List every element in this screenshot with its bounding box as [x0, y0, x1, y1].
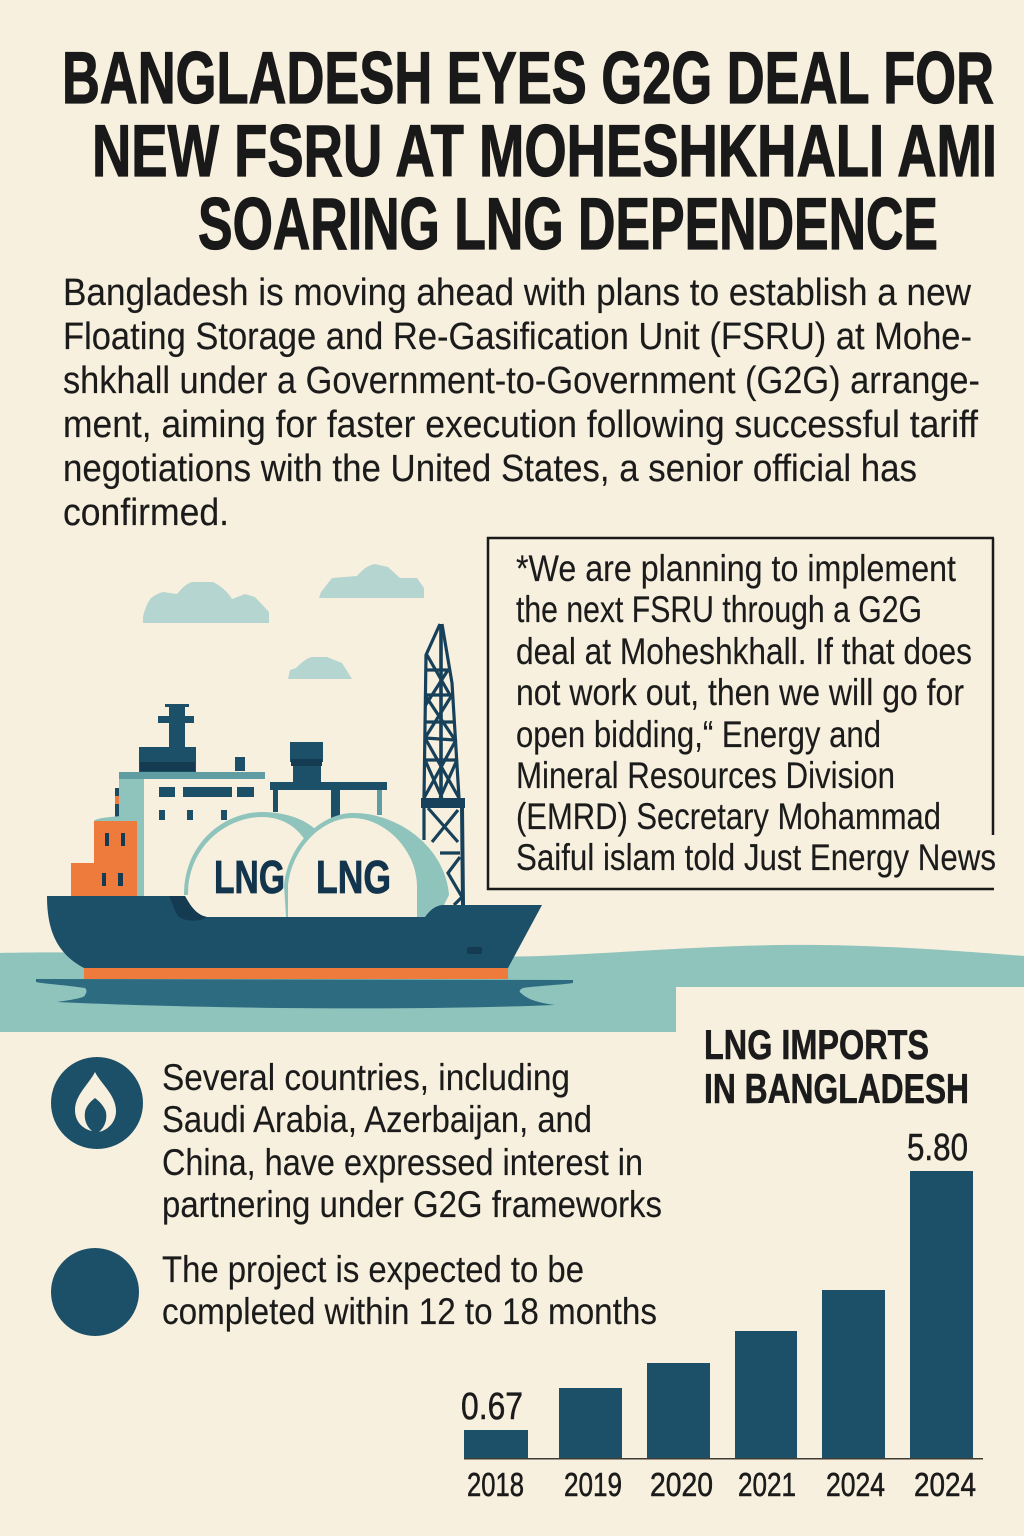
bullet: G2G partners: Saudi Arabia, Azerbaijan, and [162, 1099, 592, 1140]
clouds [143, 564, 424, 679]
bar chart: 0.67 [461, 1386, 523, 1428]
quote box: Mineral Resources Division [516, 755, 895, 796]
orange block [71, 821, 137, 896]
quote box: *We are planning to implement [516, 548, 957, 589]
illustration: LNG ship [36, 624, 573, 1008]
bullet: G2G partners: Several countries, including [162, 1057, 570, 1098]
icon: plain circle [51, 1248, 139, 1336]
bullet: G2G partners: partnering under G2G frameworks [162, 1184, 662, 1225]
chart heading [704, 1021, 969, 1112]
LNG tanks [184, 812, 316, 917]
tank labels: LNG [316, 851, 391, 903]
title [62, 38, 997, 265]
quote box [488, 538, 996, 889]
tank labels [214, 851, 391, 903]
bar chart: 2018 [467, 1466, 524, 1503]
rear small stacks [115, 788, 121, 817]
hull [47, 896, 542, 968]
bar chart: 5.80 [907, 1127, 968, 1169]
bullet: G2G partners: China, have expressed interest in [162, 1142, 643, 1183]
windows [159, 787, 254, 820]
bar chart [461, 1127, 983, 1503]
intro paragraph: ment, aiming for faster execution following successful tariff [63, 404, 978, 446]
superstructure [119, 776, 144, 896]
tower lattice [421, 624, 465, 905]
bullet: timeline [162, 1249, 657, 1332]
bar chart: 2024 [826, 1466, 885, 1503]
tank labels: LNG [214, 851, 285, 903]
quote box: not work out, then we will go for [516, 672, 964, 713]
orange waterline [84, 968, 508, 979]
intro paragraph: confirmed. [63, 492, 229, 534]
bullet: timeline: The project is expected to be [162, 1249, 584, 1290]
quote box: open bidding,“ Energy and [516, 714, 881, 755]
intro paragraph [63, 272, 980, 534]
icon: flame [51, 1057, 143, 1149]
funnel and mast [139, 704, 245, 772]
bullet: timeline: completed within 12 to 18 months [162, 1291, 657, 1332]
intro paragraph: Bangladesh is moving ahead with plans to establish a new [63, 272, 972, 314]
bar chart: 2024 [914, 1466, 976, 1503]
quote box: the next FSRU through a G2G [516, 589, 922, 630]
water band [0, 945, 1024, 1032]
deck structure [270, 742, 387, 818]
bar chart: 2020 [650, 1466, 713, 1503]
intro paragraph: negotiations with the United States, a senior official has [63, 448, 917, 490]
bar chart: 2019 [564, 1466, 622, 1503]
bar chart: 2021 [738, 1466, 796, 1503]
ship reflection [36, 979, 573, 1008]
bullet: G2G partners [162, 1057, 662, 1225]
chart heading: LNG IMPORTS [704, 1021, 929, 1068]
quote box: (EMRD) Secretary Mohammad [516, 796, 941, 837]
